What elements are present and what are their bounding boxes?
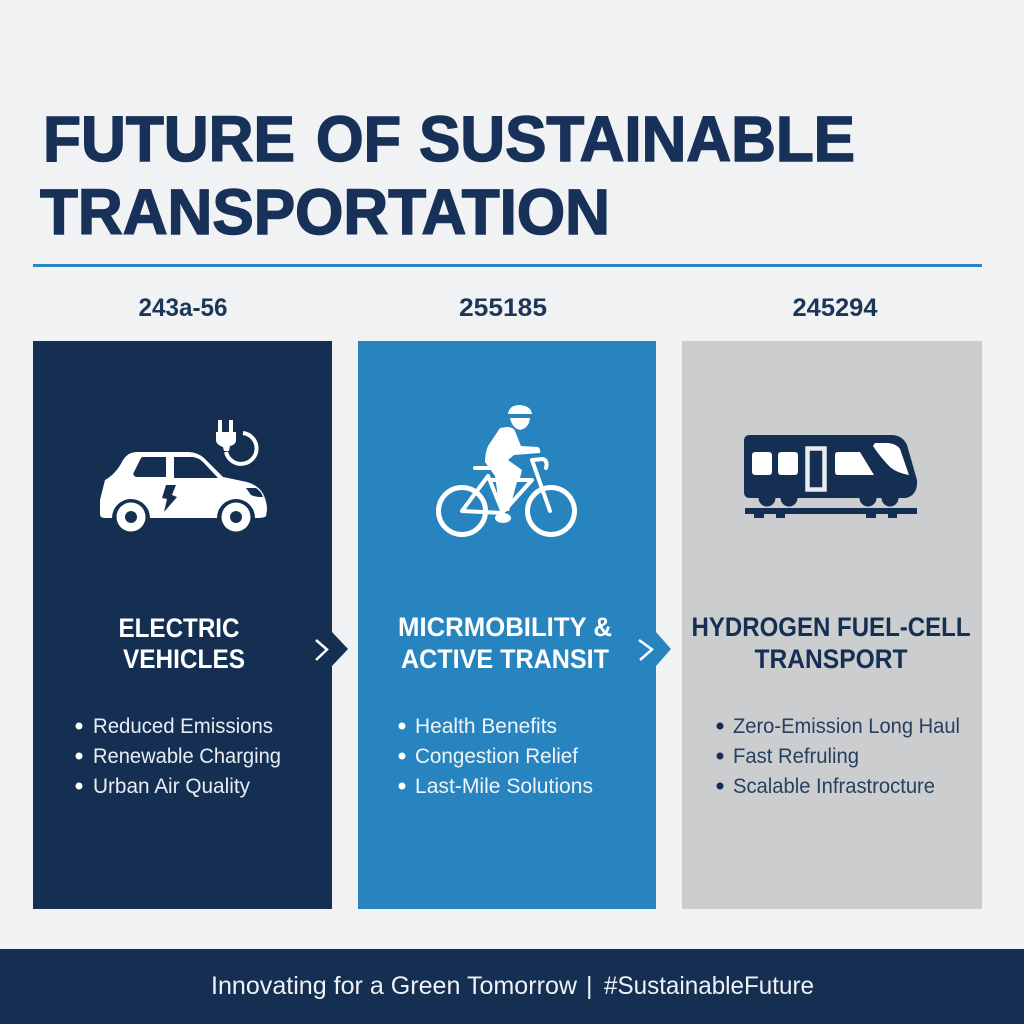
column codes: 245294	[792, 294, 878, 322]
footer: |	[586, 972, 592, 1000]
column codes: 243a-56	[138, 294, 228, 322]
column codes: 255185	[459, 294, 547, 322]
footer: #SustainableFuture	[604, 972, 814, 1000]
list: micromobility: Health Benefits	[415, 715, 557, 738]
panel: electric vehicles	[33, 341, 348, 909]
heading: electric vehicles: ELECTRIC	[118, 613, 240, 643]
title	[40, 103, 855, 248]
heading: micromobility: ACTIVE TRANSIT	[401, 644, 609, 674]
list: hydrogen: Scalable Infrastrocture	[733, 775, 935, 798]
heading: micromobility: MICRMOBILITY &	[398, 612, 612, 642]
panel: hydrogen	[682, 341, 982, 909]
list: electric vehicles: Renewable Charging	[93, 745, 281, 768]
arrow: electric vehicles to micromobility	[316, 632, 348, 666]
heading: hydrogen: HYDROGEN FUEL-CELL	[692, 612, 970, 642]
arrow: micromobility to hydrogen	[639, 632, 671, 666]
icon: electric car with plug	[100, 420, 267, 532]
title: FUTURE	[43, 103, 295, 175]
list: electric vehicles: Reduced Emissions	[93, 715, 273, 738]
list: micromobility: Last-Mile Solutions	[415, 775, 593, 798]
title: SUSTAINABLE	[419, 103, 855, 175]
panel: micromobility	[358, 341, 671, 909]
list: electric vehicles: Urban Air Quality	[93, 775, 250, 798]
list: hydrogen	[716, 715, 960, 798]
heading: hydrogen	[692, 612, 970, 674]
title: OF	[316, 103, 401, 175]
list: micromobility	[398, 715, 593, 798]
list: micromobility: Congestion Relief	[415, 745, 578, 768]
heading: hydrogen: TRANSPORT	[754, 644, 908, 674]
heading: electric vehicles: VEHICLES	[123, 644, 245, 674]
list: hydrogen: Fast Refruling	[733, 745, 859, 768]
list: hydrogen: Zero-Emission Long Haul	[733, 715, 960, 738]
list: electric vehicles	[76, 715, 281, 798]
column codes	[138, 294, 878, 322]
title: TRANSPORTATION	[40, 176, 610, 248]
footer	[0, 949, 1024, 1024]
footer: Innovating for a Green Tomorrow	[211, 972, 578, 1000]
icon: train	[744, 435, 917, 518]
heading: electric vehicles	[118, 613, 245, 674]
heading: micromobility	[398, 612, 612, 674]
icon: cyclist	[438, 405, 574, 534]
